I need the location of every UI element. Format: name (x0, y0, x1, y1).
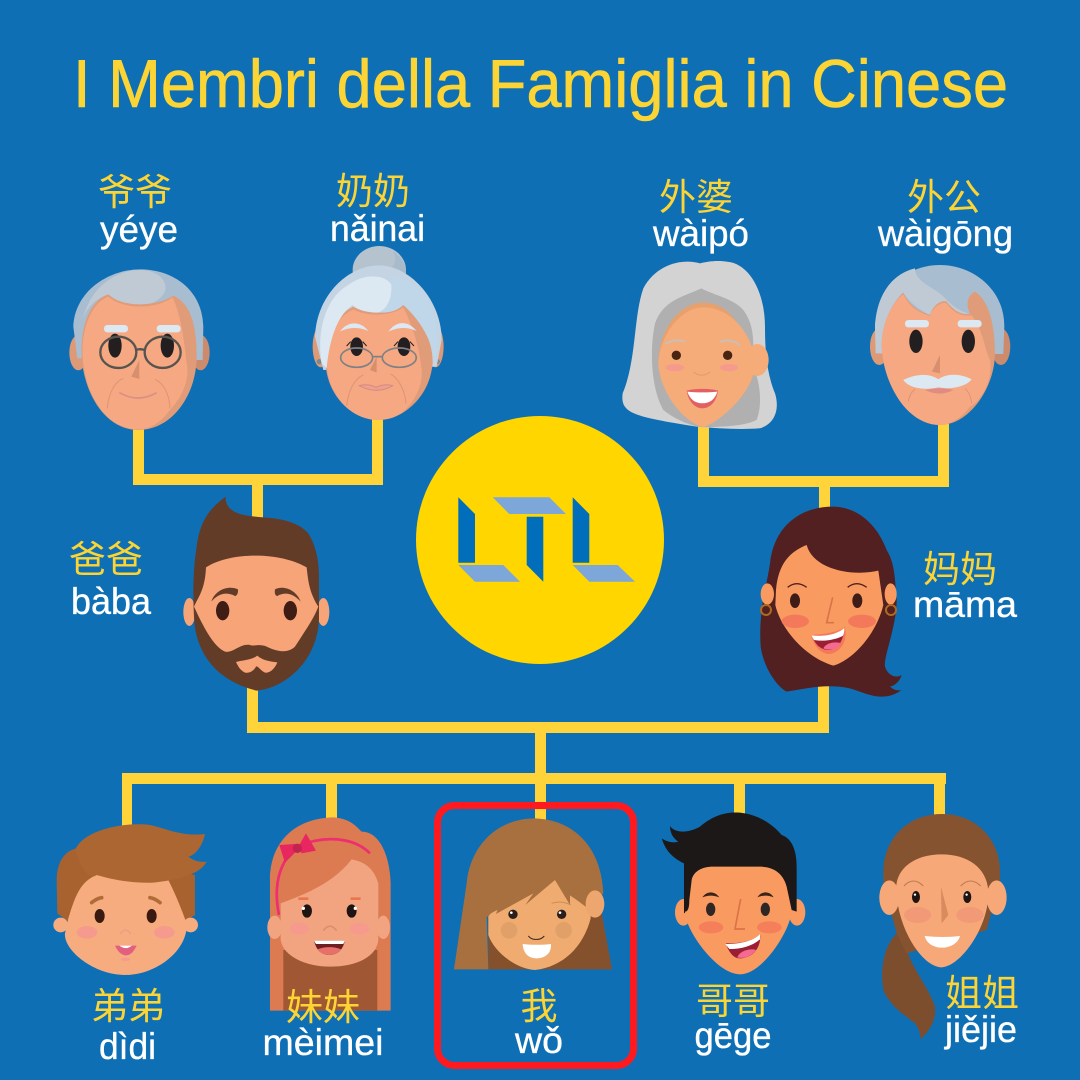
person: younger sister meimei (262, 817, 391, 1063)
logo: LTL yellow circle (416, 416, 664, 664)
Chinese label: waipo: 外婆 (659, 177, 733, 218)
pinyin: wo: wǒ (514, 1020, 563, 1061)
pinyin: didi: dìdi (99, 1026, 156, 1067)
Chinese label: mama: 妈妈 (923, 549, 997, 590)
face: yeye (69, 269, 210, 430)
person: older sister jiejie (879, 814, 1019, 1050)
pinyin: mama: māma (913, 584, 1017, 625)
pinyin: meimei: mèimei (262, 1022, 384, 1063)
pinyin: waipo: wàipó (652, 213, 749, 254)
pinyin: baba: bàba (71, 581, 151, 622)
Chinese label: wo: 我 (520, 986, 558, 1027)
person: grandmother nainai (313, 171, 444, 420)
person: father baba (69, 497, 329, 691)
face: waipo (622, 261, 777, 429)
face: nainai (313, 246, 444, 420)
pinyin: gege: gēge (694, 1015, 772, 1056)
Chinese label: yeye: 爷爷 (98, 172, 172, 213)
Chinese label: waigong: 外公 (907, 177, 981, 218)
face: gege (662, 812, 805, 974)
face: jiejie (879, 814, 1007, 1039)
face: waigong (870, 265, 1010, 425)
title: I Membri della Famiglia in Cinese (73, 46, 1008, 122)
face: wo (454, 818, 612, 970)
face: didi (53, 824, 207, 975)
person: me wo (highlighted) (438, 806, 634, 1066)
pinyin: jiejie: jiějie (944, 1009, 1017, 1050)
person: maternal grandmother waipo (622, 177, 777, 429)
family tree connectors (122, 415, 949, 828)
person: older brother gege (662, 812, 805, 1056)
Chinese label: gege: 哥哥 (696, 981, 770, 1022)
Chinese label: meimei: 妹妹 (286, 987, 360, 1028)
pinyin: waigong: wàigōng (877, 213, 1013, 254)
person: mother mama (760, 507, 1017, 697)
Chinese label: baba: 爸爸 (69, 539, 143, 580)
pinyin: yeye: yéye (100, 209, 178, 250)
Chinese label: didi: 弟弟 (91, 986, 165, 1027)
person: grandfather yeye (69, 172, 210, 430)
face: baba (183, 497, 329, 691)
highlight box (438, 806, 634, 1066)
person: maternal grandfather waigong (870, 177, 1013, 425)
pinyin: nainai: nǎinai (330, 208, 425, 249)
face: mama (760, 507, 902, 697)
face: meimei (267, 817, 391, 1011)
Chinese label: nainai: 奶奶 (336, 171, 410, 212)
Chinese label: jiejie: 姐姐 (945, 973, 1019, 1014)
person: younger brother didi (53, 824, 207, 1067)
